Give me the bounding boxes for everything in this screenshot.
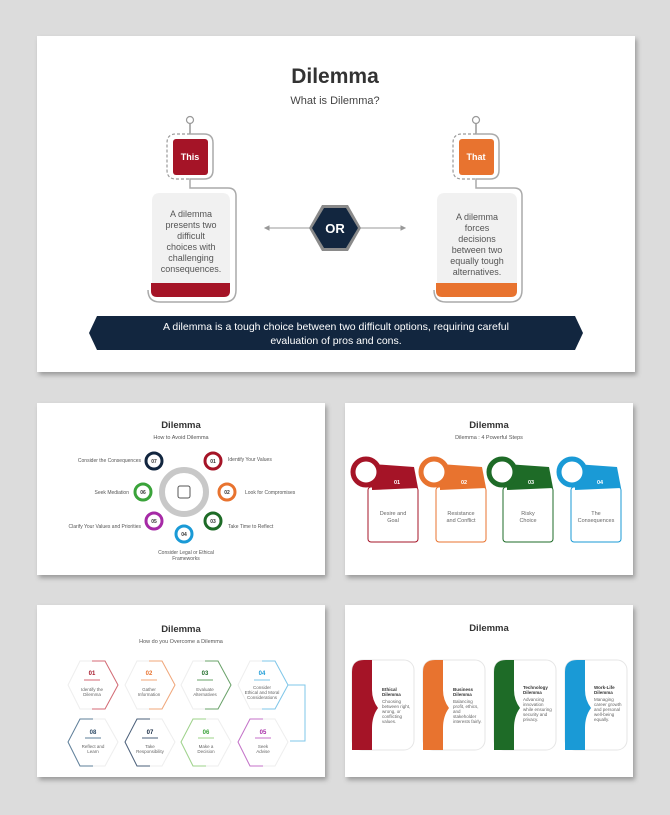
steps ring: Clarify Your Values and Priorities — [69, 524, 141, 530]
panel: 4 Powerful Steps — [345, 403, 633, 575]
hexagon steps: 02 — [146, 671, 153, 677]
type cards: innovation — [523, 702, 544, 707]
panel: Dilemma types — [345, 605, 633, 777]
panel: How do you Overcome a Dilemma — [37, 605, 325, 777]
hexagon steps: Responsibility — [136, 749, 165, 754]
type cards: and — [453, 709, 461, 714]
type cards: Dilemma — [594, 690, 613, 695]
hexagon steps: Learn — [87, 749, 99, 754]
hexagon steps: Advise — [256, 749, 270, 754]
title: Dilemma — [291, 65, 379, 88]
type cards: Work-Life — [594, 685, 615, 690]
type cards: security and — [523, 712, 548, 717]
type cards: privacy. — [523, 717, 538, 722]
hexagon steps: 04 — [259, 671, 266, 677]
option: That: decisions — [458, 234, 496, 244]
panel: How to Avoid Dilemma: Dilemma — [161, 420, 202, 431]
steps ring — [69, 453, 296, 562]
arrow: left/right — [265, 226, 405, 230]
hexagon steps: 03 — [202, 671, 209, 677]
type cards: wrong, or — [382, 709, 401, 714]
type cards: Business — [453, 687, 474, 692]
type cards: and personal — [594, 707, 620, 712]
step cards: Risky — [521, 511, 535, 517]
option: That: That — [466, 152, 486, 162]
step cards: 02 — [461, 480, 467, 486]
type cards — [352, 660, 627, 750]
hexagon steps: 01 — [89, 671, 96, 677]
hexagon steps: Gather — [142, 687, 156, 692]
panel: How do you Overcome a Dilemma: How do you Overcome a Dilemma — [139, 639, 224, 645]
banner: A dilemma is a tough choice between two difficult options, requiring careful — [163, 321, 509, 333]
type cards: Advancing — [523, 697, 545, 702]
steps ring: Identify Your Values — [228, 457, 272, 463]
type cards: Managing — [594, 697, 614, 702]
hexagon steps: 07 — [147, 730, 154, 736]
step cards: and Conflict — [446, 518, 476, 524]
hexagon steps: Take — [145, 744, 155, 749]
step cards: The — [591, 511, 601, 517]
hexagon steps: Consider — [253, 685, 272, 690]
type cards: career growth — [594, 702, 622, 707]
option: That: between two — [452, 245, 502, 255]
steps ring: Take Time to Reflect — [228, 524, 274, 530]
type cards: Dilemma — [453, 692, 472, 697]
hexagon steps: Dilemma — [83, 692, 101, 697]
option: That: A dilemma — [456, 212, 498, 222]
steps ring: Seek Mediation — [95, 490, 129, 496]
panel: 4 Powerful Steps: Dilemma — [469, 420, 510, 431]
OR hexagon: OR — [325, 221, 345, 236]
option: This — [148, 116, 236, 302]
step cards: Resistance — [447, 511, 475, 517]
type cards: Dilemma — [382, 692, 401, 697]
panel: How to Avoid Dilemma: How to Avoid Dilemma — [153, 435, 210, 441]
option: This: choices with — [166, 242, 216, 252]
type cards: Balancing — [453, 699, 473, 704]
hexagon steps: Evaluate — [196, 687, 214, 692]
step cards: 01 — [394, 480, 400, 486]
type cards: stakeholder — [453, 714, 477, 719]
hexagon steps: 05 — [260, 730, 267, 736]
type cards: between right, — [382, 704, 410, 709]
steps ring: 06 — [140, 490, 146, 496]
type cards: Choosing — [382, 699, 402, 704]
hexagon steps: Considerations — [247, 695, 278, 700]
steps ring: 01 — [210, 459, 216, 465]
hexagon steps: Reflect and — [82, 744, 105, 749]
option: This: presents two — [165, 220, 217, 230]
hexagon steps: Identify the — [81, 687, 104, 692]
option: That: alternatives. — [453, 267, 501, 277]
type cards: interests fairly. — [453, 719, 482, 724]
hexagon steps: Ethical and Moral — [245, 690, 279, 695]
step cards: Choice — [519, 518, 537, 524]
type cards: values. — [382, 719, 396, 724]
step cards: 03 — [528, 480, 534, 486]
panel: How do you Overcome a Dilemma: Dilemma — [161, 624, 202, 635]
OR hexagon — [309, 205, 361, 251]
option: This: This — [181, 152, 199, 162]
hexagon steps: 06 — [203, 730, 210, 736]
steps ring: 05 — [151, 519, 157, 525]
hexagon steps: 08 — [90, 730, 97, 736]
step cards: Consequences — [578, 518, 615, 524]
type cards: Dilemma — [523, 690, 542, 695]
steps ring: Consider the Consequences — [78, 458, 141, 464]
steps ring: 04 — [181, 532, 187, 538]
option: This: difficult — [177, 231, 205, 241]
panel: Dilemma types: Dilemma — [469, 623, 510, 634]
hexagon steps — [68, 661, 305, 766]
steps ring: 03 — [210, 519, 216, 525]
steps ring: 07 — [151, 459, 157, 465]
hexagon steps: Decision — [197, 749, 215, 754]
option: That: forces — [465, 223, 490, 233]
option: This: A dilemma — [170, 209, 212, 219]
step cards: 04 — [597, 480, 604, 486]
option: This: challenging — [168, 253, 214, 263]
option: That — [434, 116, 522, 302]
type cards: profit, ethics, — [453, 704, 479, 709]
type cards: well-being — [594, 712, 615, 717]
type cards: Ethical — [382, 687, 397, 692]
hexagon steps: Alternatives — [193, 692, 218, 697]
hexagon steps: Information — [138, 692, 161, 697]
banner — [89, 316, 583, 350]
steps ring: Consider Legal or Ethical — [158, 550, 214, 556]
step cards: Desire and — [380, 511, 406, 517]
panel: 4 Powerful Steps: Dilemma : 4 Powerful Steps — [455, 435, 523, 441]
hexagon steps: Seek — [258, 744, 269, 749]
banner: evaluation of pros and cons. — [270, 335, 402, 347]
type cards: conflicting — [382, 714, 403, 719]
center icon circle — [162, 470, 206, 514]
step cards: Goal — [387, 518, 399, 524]
steps ring: 02 — [224, 490, 230, 496]
subtitle: What is Dilemma? — [290, 95, 380, 107]
type cards: while ensuring — [523, 707, 552, 712]
option: This: consequences. — [161, 264, 221, 274]
panel: How to Avoid Dilemma — [37, 403, 325, 575]
panel: main slide — [37, 36, 635, 372]
option: That: equally tough — [450, 256, 504, 266]
steps ring: Look for Compromises — [245, 490, 296, 496]
type cards: Technology — [523, 685, 548, 690]
hexagon steps: Make a — [199, 744, 214, 749]
steps ring: Frameworks — [172, 556, 200, 562]
type cards: equally. — [594, 717, 609, 722]
step cards — [353, 459, 621, 542]
